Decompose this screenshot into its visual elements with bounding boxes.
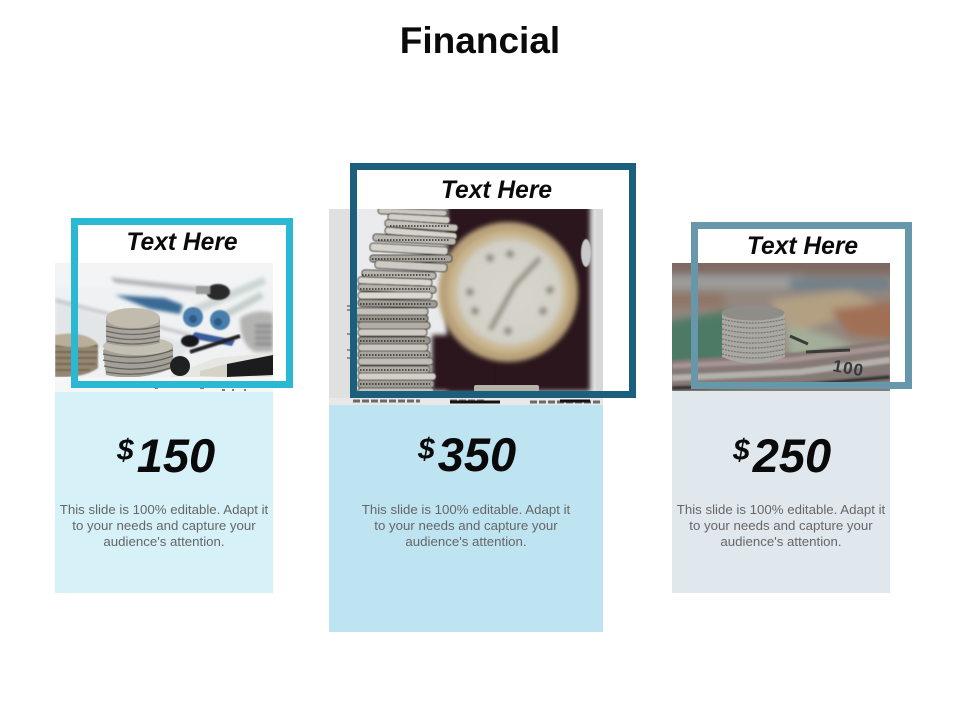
description: to your needs and capture your: [374, 518, 558, 533]
price: $150: [117, 429, 215, 482]
knob on the right: [581, 239, 591, 267]
coin stack: [722, 306, 785, 364]
description: [362, 502, 570, 549]
description: This slide is 100% editable. Adapt it: [60, 502, 268, 517]
description: audience's attention.: [405, 534, 527, 549]
description: This slide is 100% editable. Adapt it: [677, 502, 885, 517]
heading: Text Here: [126, 229, 238, 256]
coin tower: [352, 208, 458, 395]
description: This slide is 100% editable. Adapt it: [362, 502, 570, 517]
heading: Text Here: [747, 233, 858, 260]
banknote marks: [790, 336, 850, 352]
frame: [350, 163, 636, 398]
coin strip at the bottom: [329, 398, 603, 405]
price: $350: [418, 428, 516, 481]
coins, upper stack: [106, 308, 160, 346]
panel: left card $150: [55, 218, 293, 593]
photo: coins and pens: [55, 263, 273, 392]
description: to your needs and capture your: [72, 518, 256, 533]
coin in the foreground: [474, 385, 539, 392]
side text ghost: [347, 306, 350, 358]
description: audience's attention.: [720, 534, 842, 549]
panel: centre card $350: [329, 163, 636, 632]
card background: [55, 263, 273, 593]
clock: [438, 222, 578, 362]
coins, lower stack: [103, 337, 173, 377]
heading: Text Here: [441, 177, 552, 204]
coins, right stack: [240, 311, 273, 352]
panel: right card $250: [672, 222, 912, 593]
pens, foreground: [55, 336, 273, 392]
coins, left stack: [55, 334, 98, 377]
coin ridges: [360, 226, 450, 384]
description: [677, 502, 886, 549]
photo: coin tower and clock: [329, 209, 603, 405]
description: audience's attention.: [103, 534, 225, 549]
card background: [329, 209, 603, 632]
description: [60, 502, 268, 549]
banknote numbers: 100: [831, 356, 866, 380]
frame: [691, 222, 912, 389]
description: to your needs and capture your: [689, 518, 873, 533]
price: $250: [733, 429, 831, 482]
frame: [71, 218, 293, 388]
photo: coins on banknotes: [672, 263, 890, 391]
card background: [672, 263, 890, 593]
title: Financial: [400, 20, 560, 61]
